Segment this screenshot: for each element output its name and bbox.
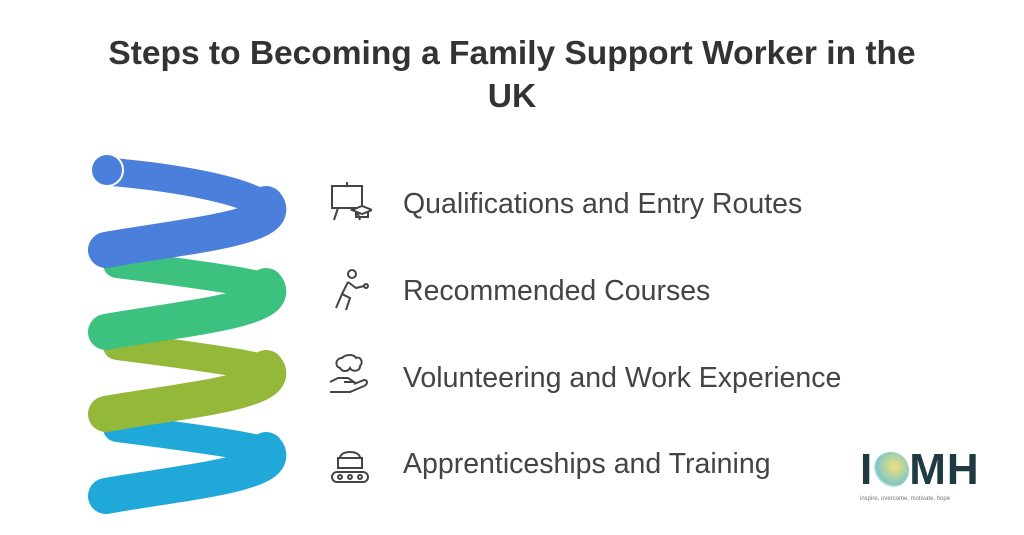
icon: easel with graduation cap <box>331 182 372 220</box>
text: Volunteering and Work Experience <box>403 362 841 394</box>
text: Qualifications and Entry Routes <box>403 188 802 220</box>
text: Recommended Courses <box>403 275 710 307</box>
logo: IOMH: I MH <box>860 445 980 494</box>
title <box>108 35 916 115</box>
logo: IOMH: inspire, overcome, motivate, hope <box>860 496 950 502</box>
back strands <box>112 172 262 450</box>
text: Apprenticeships and Training <box>403 448 771 480</box>
front strands <box>106 204 268 496</box>
icon: person <box>335 269 369 310</box>
title: UK <box>488 78 536 115</box>
icon: conveyor <box>331 451 369 483</box>
title: Steps to Becoming a Family Support Worker in the <box>108 35 916 72</box>
icon: hand with brain <box>330 354 368 393</box>
spiral chart <box>88 155 286 514</box>
